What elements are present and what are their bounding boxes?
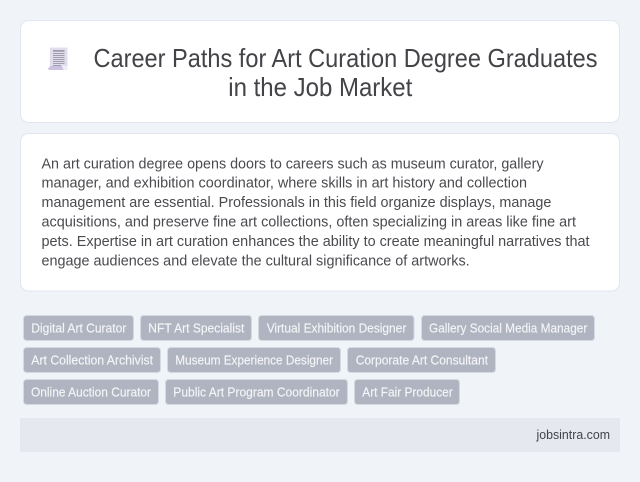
panel: description [20,134,620,291]
tag: Virtual Exhibition Designer: Virtual Exhibition Designer [267,320,407,336]
title: in the Job Market [228,74,412,102]
tag: Art Fair Producer: Art Fair Producer [362,384,453,400]
tag: Museum Experience Designer: Museum Experience Designer [175,352,334,368]
tag list [24,316,594,404]
tag: Digital Art Curator [24,316,134,340]
text block: description: management are essential. Professionals in this field organize displays, manage [42,194,551,211]
text block: description [42,155,590,269]
tag: Online Auction Curator: Online Auction Curator [31,384,152,400]
panel: title header [20,20,620,122]
tag: Digital Art Curator: Digital Art Curator [31,320,127,336]
tag: Virtual Exhibition Designer [258,316,414,340]
text block: description: acquisitions, and preserve fine art collections, often specializing in areas like fine art [42,214,577,230]
text block: description: manager, and exhibition coordinator, where skills in art history and collection [42,174,527,191]
tag: Corporate Art Consultant: Corporate Art Consultant [356,352,488,368]
tag: NFT Art Specialist: NFT Art Specialist [148,320,245,336]
tag: Art Collection Archivist [24,348,160,372]
tag: Museum Experience Designer [168,348,340,372]
tag: Corporate Art Consultant [348,348,496,372]
footer bar [20,418,620,452]
tag: Gallery Social Media Manager [422,316,594,340]
tag: NFT Art Specialist [140,316,252,340]
footer source text: jobsintra.com [536,427,610,442]
tag: Art Fair Producer [354,380,460,404]
text block: description: pets. Expertise in art curation enhances the ability to create meaningful narratives that [42,233,590,250]
tag: Online Auction Curator [24,380,158,404]
text block: description: engage audiences and elevate the cultural significance of artworks. [42,252,470,269]
tag: Public Art Program Coordinator: Public Art Program Coordinator [173,384,340,400]
tag: Public Art Program Coordinator [166,380,348,404]
text block: description: An art curation degree opens doors to careers such as museum curator, gallery [42,155,544,172]
tag: Gallery Social Media Manager: Gallery Social Media Manager [429,320,588,336]
tag: Art Collection Archivist: Art Collection Archivist [31,352,153,368]
title [94,45,598,102]
title: Career Paths for Art Curation Degree Graduates [94,45,598,73]
icon: document scroll [48,48,68,70]
